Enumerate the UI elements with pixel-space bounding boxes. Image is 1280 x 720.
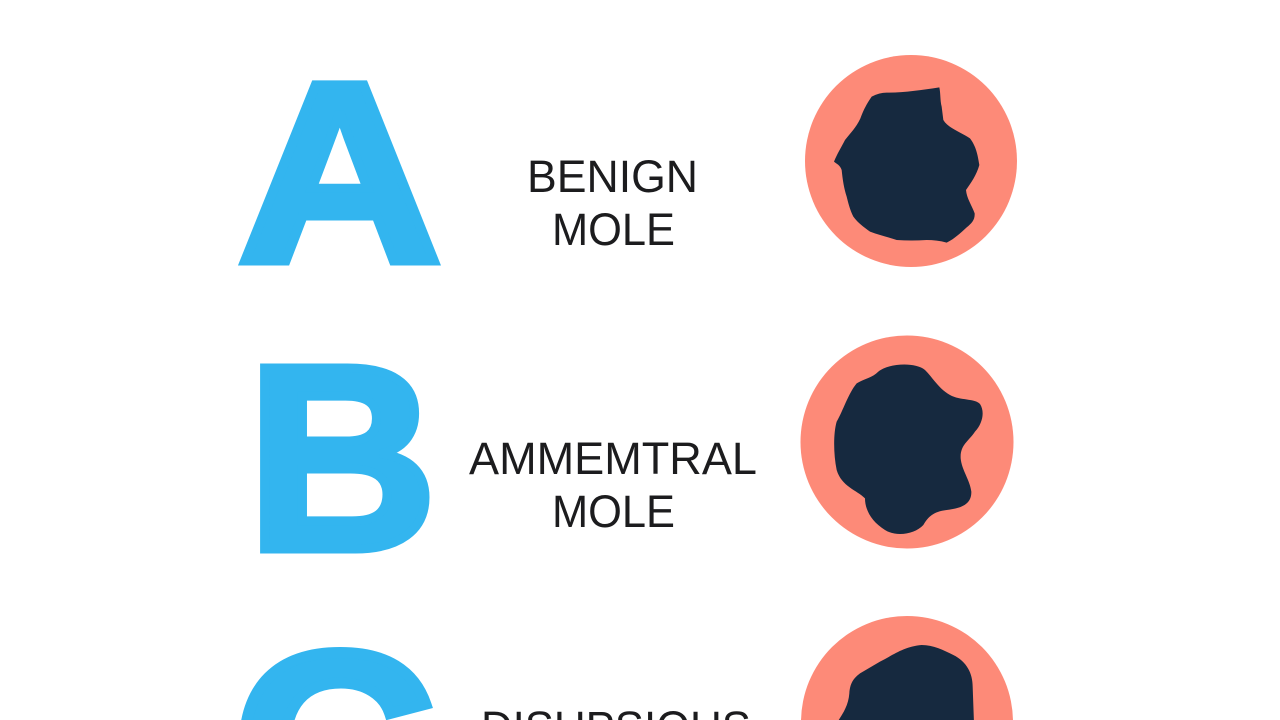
label: benign mole: BENIGN: [527, 151, 698, 202]
label: benign mole: [527, 151, 698, 255]
label: ammemtral mole: [469, 433, 757, 537]
label: ammemtral mole: MOLE: [552, 486, 675, 537]
label: benign mole: MOLE: [552, 204, 675, 255]
icon: third mole: [801, 616, 1013, 720]
icon: benign mole: [805, 55, 1017, 267]
letter B: B: [247, 311, 437, 605]
letter A: A: [238, 30, 441, 316]
icon: ammemtral mole: [800, 336, 1014, 548]
label: ammemtral mole: AMMEMTRAL: [469, 433, 757, 484]
